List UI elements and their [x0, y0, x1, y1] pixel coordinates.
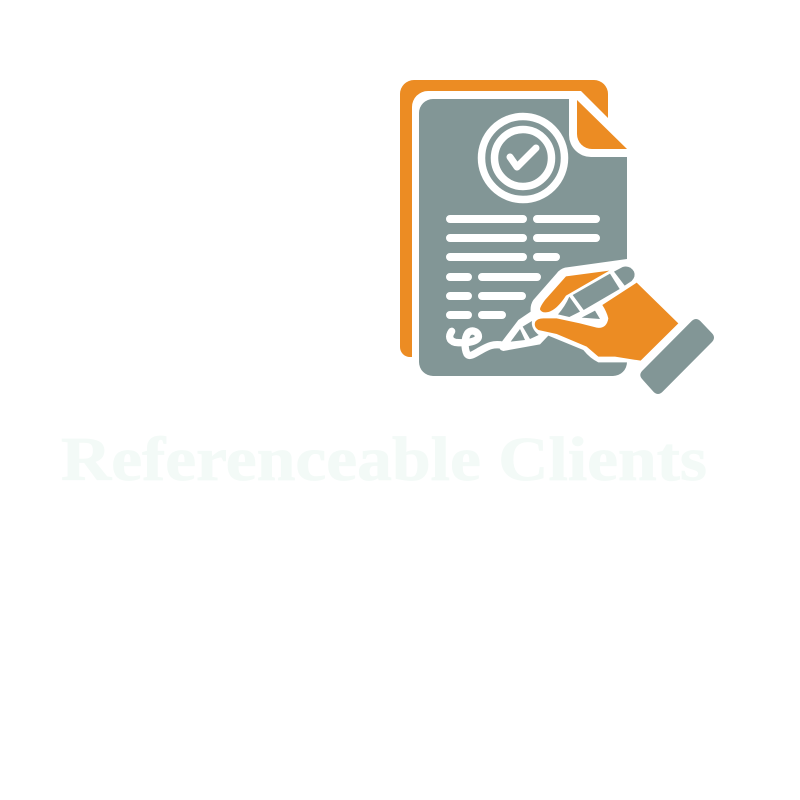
pen grip — [558, 297, 580, 317]
wedge between pen and thumb — [582, 311, 600, 319]
front sheet — [419, 99, 627, 376]
folded corner — [577, 100, 627, 149]
icon: signed document with hand — [400, 80, 714, 394]
pen cap — [614, 267, 635, 286]
pen tip — [511, 329, 525, 342]
badge with check mark — [482, 116, 564, 200]
text lines on document — [450, 219, 596, 315]
white outline of hand — [499, 259, 657, 362]
pen barrel — [573, 274, 620, 310]
index finger — [540, 271, 609, 312]
hand — [535, 283, 678, 361]
cuff — [640, 319, 714, 394]
signature — [450, 331, 503, 355]
hand and pen — [499, 259, 678, 362]
title: Referenceable Clients — [61, 426, 707, 494]
back sheet — [400, 80, 608, 357]
